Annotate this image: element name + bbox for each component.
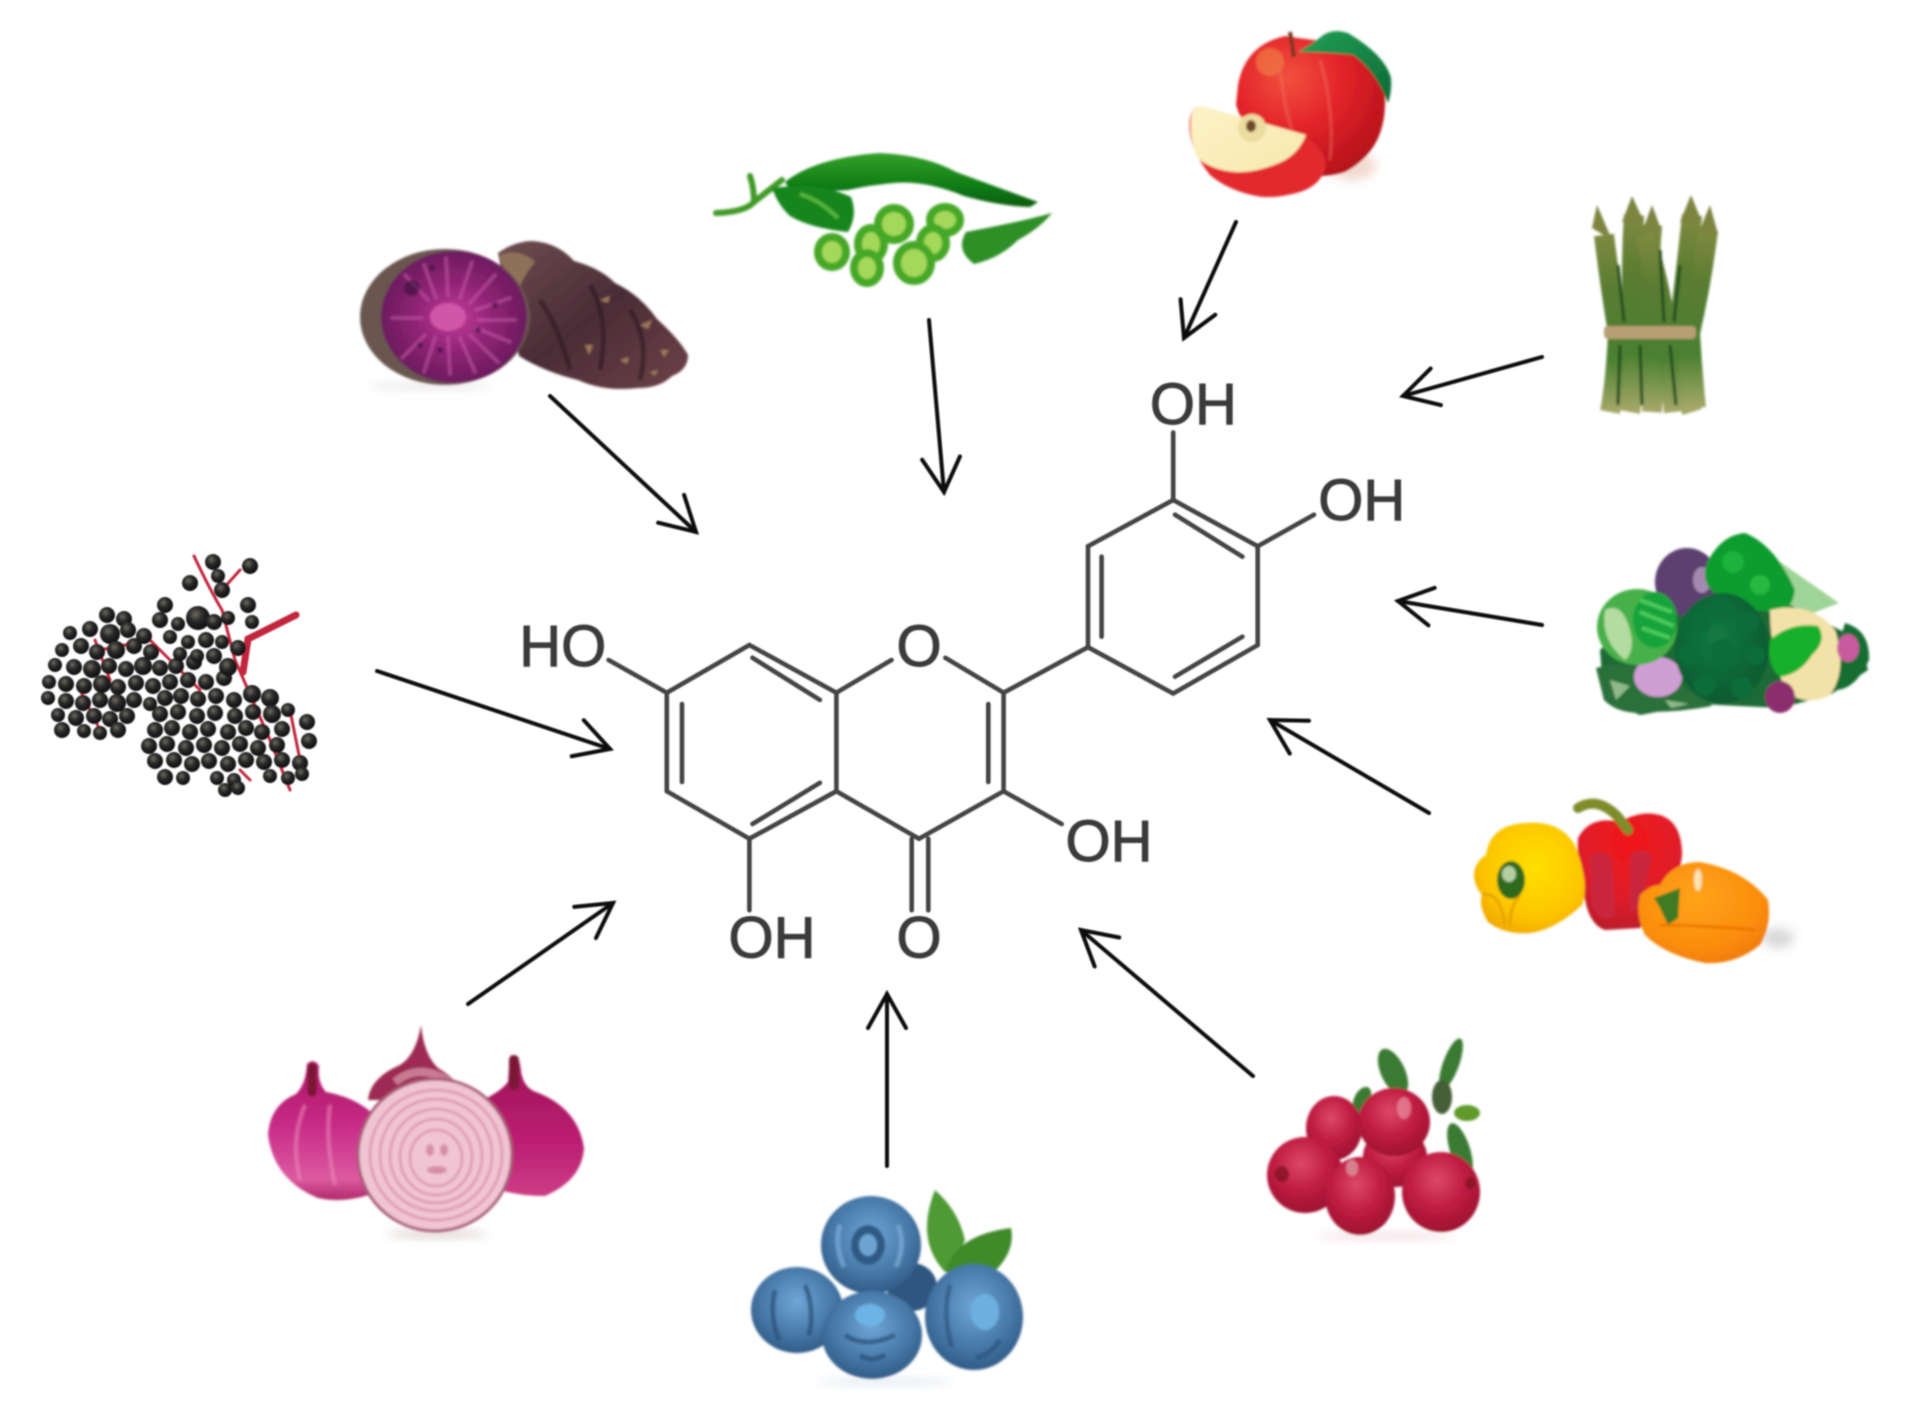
right cabbage bbox=[1835, 623, 1869, 690]
leaves bbox=[927, 1190, 965, 1272]
arrow: apple bbox=[1184, 222, 1236, 338]
back onion bbox=[368, 1025, 464, 1100]
ring B outline bbox=[1088, 500, 1258, 694]
red pepper bbox=[1578, 814, 1682, 930]
icon: green chili peppers bbox=[716, 153, 1052, 283]
berries bbox=[887, 1263, 937, 1311]
flesh texture bbox=[392, 258, 515, 374]
orange pepper bbox=[1638, 862, 1769, 963]
arrow: blueberries bbox=[885, 994, 889, 1166]
green leaf bbox=[1769, 625, 1822, 677]
onion cut face bbox=[358, 1079, 512, 1231]
lower leaves bbox=[1596, 664, 1712, 713]
pale leaf bbox=[1755, 557, 1839, 618]
yellow pepper bbox=[1474, 823, 1585, 933]
arrow: bell peppers bbox=[1270, 720, 1429, 813]
ring A outline bbox=[667, 645, 836, 839]
cauliflower bbox=[1770, 608, 1840, 700]
dark base mass bbox=[1600, 600, 1868, 715]
atom labels: O bbox=[896, 614, 942, 679]
icon: blueberries with leaves bbox=[751, 1190, 1023, 1386]
atom labels: OH bbox=[1066, 809, 1152, 874]
arrow: crucifers bbox=[1398, 601, 1542, 625]
icon: elderberry cluster bbox=[41, 554, 317, 797]
icon: bell peppers bbox=[1474, 804, 1794, 963]
icon: red apple with slice bbox=[1189, 31, 1391, 197]
icon: red onions bbox=[268, 1025, 584, 1238]
atom labels: OH bbox=[1318, 468, 1405, 533]
icon: asparagus bundle bbox=[1592, 195, 1718, 412]
inner double bonds bbox=[682, 515, 1242, 824]
leaves bbox=[1349, 1036, 1480, 1180]
berries bbox=[1267, 1088, 1480, 1235]
chili slices bbox=[818, 207, 960, 283]
icon: purple sweet potato bbox=[360, 241, 688, 390]
arrow: onions bbox=[468, 903, 613, 1004]
molecule: flavonol structure bbox=[519, 372, 1405, 970]
atom labels: HO bbox=[519, 614, 606, 679]
apple slice bbox=[1189, 107, 1326, 197]
icon: cruciferous vegetables bbox=[1596, 533, 1869, 715]
arrow: cranberries bbox=[1081, 930, 1253, 1076]
arrow: elderberries bbox=[377, 671, 610, 749]
atom labels bbox=[519, 372, 1405, 970]
berries bbox=[41, 554, 317, 797]
atom labels: OH bbox=[728, 906, 816, 970]
red stems bbox=[80, 556, 300, 790]
purple leaf bbox=[1765, 681, 1795, 713]
leaf and stem bbox=[1290, 32, 1294, 57]
purple cabbage bbox=[1655, 548, 1719, 616]
leafy greens bbox=[1705, 533, 1795, 612]
atom labels: O bbox=[896, 906, 942, 970]
green cabbage bbox=[1597, 589, 1677, 665]
arrow: chili bbox=[929, 320, 944, 492]
spear tips bbox=[1592, 195, 1718, 240]
ring C bonds bbox=[836, 658, 1004, 839]
broccoli bbox=[1675, 593, 1769, 703]
arrow: sweet potato bbox=[550, 396, 696, 532]
icon: cranberries with leaves bbox=[1267, 1036, 1480, 1240]
arrows: food sources to molecule bbox=[377, 222, 1542, 1166]
right onion bbox=[470, 1056, 584, 1196]
atom labels: OH bbox=[1150, 372, 1237, 437]
left onion bbox=[268, 1061, 390, 1200]
substituent bonds bbox=[609, 433, 1314, 910]
arrow: asparagus bbox=[1403, 357, 1542, 396]
